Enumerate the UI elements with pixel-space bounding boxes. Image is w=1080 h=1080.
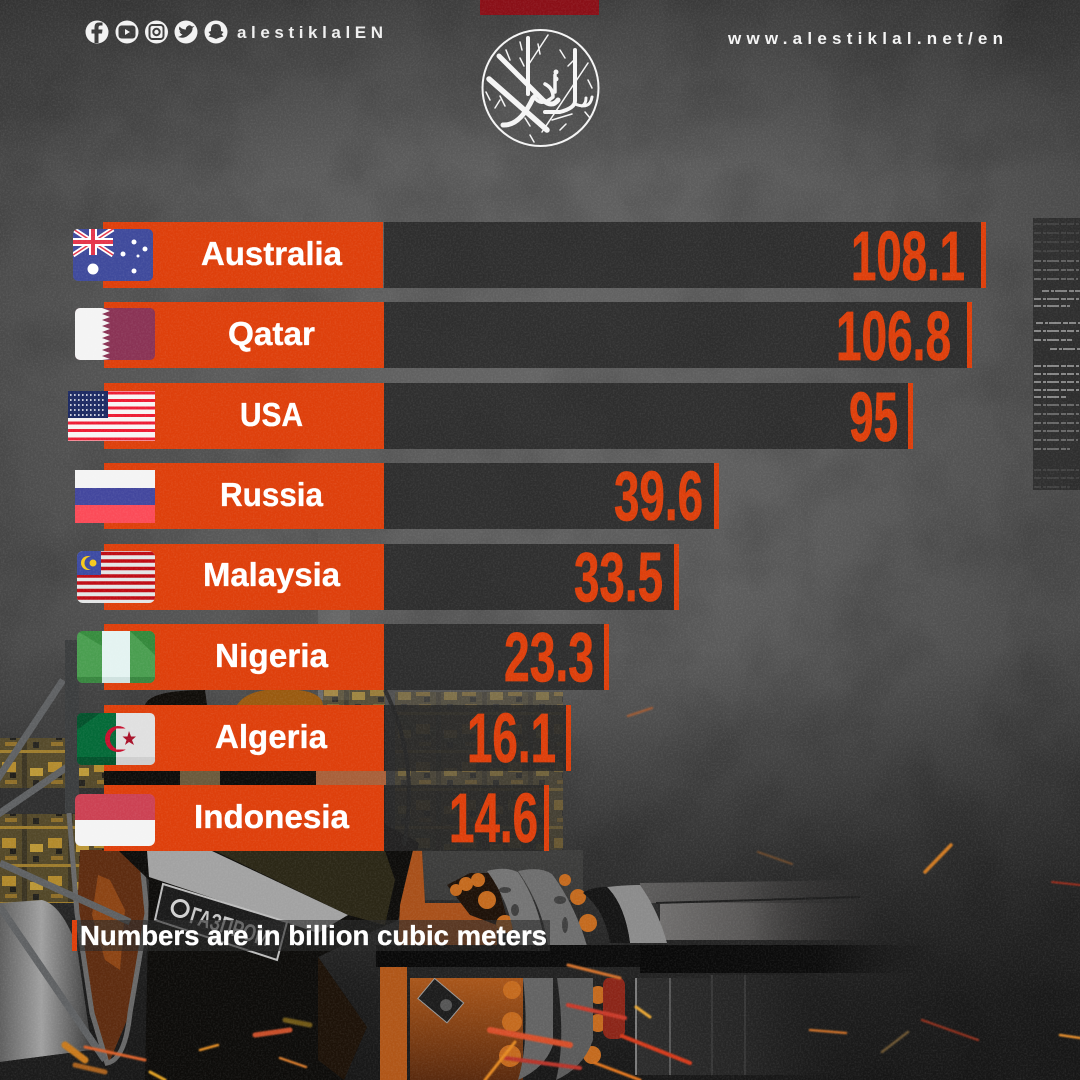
header: top red tab <box>480 0 599 15</box>
row: Australia <box>73 222 986 288</box>
row: Indonesia: 14.6 <box>449 779 538 857</box>
photo: orange valve and flange <box>380 850 625 1080</box>
photo: Gazprom badge <box>155 884 287 960</box>
row: Qatar: Qatar <box>228 315 315 352</box>
row: Algeria: 16.1 <box>467 699 556 777</box>
flag: Qatar <box>75 308 155 360</box>
icon: instagram <box>145 20 168 44</box>
photo: scaffold struts <box>0 640 409 1060</box>
newspaper text texture on right edge <box>1033 218 1080 490</box>
photo: worker in dark jacket <box>119 689 419 1080</box>
row: Australia: Australia <box>201 235 343 272</box>
logo: calligraphic roundel <box>482 30 598 146</box>
handle text: alestiklalEN <box>237 23 383 42</box>
header: social icons and handle <box>86 20 383 44</box>
flag: Indonesia <box>75 794 155 846</box>
row: Nigeria: Nigeria <box>215 637 329 674</box>
row: Indonesia <box>75 785 549 851</box>
row: USA: 95 <box>849 378 898 456</box>
row: Qatar <box>75 302 972 368</box>
photo: Gazprom badge: ГАЗПРОМ <box>187 902 273 952</box>
photo: steel beams <box>376 945 940 978</box>
row: Algeria: Algeria <box>215 718 328 755</box>
row: Indonesia: Indonesia <box>194 798 350 835</box>
row: Malaysia <box>77 544 679 610</box>
row: Nigeria: 23.3 <box>504 618 594 696</box>
row: Russia: 39.6 <box>614 457 703 535</box>
row: Russia <box>75 457 719 535</box>
icon: facebook <box>86 20 108 44</box>
unit note: Numbers are in billion cubic meters <box>80 920 547 951</box>
row: Australia: 108.1 <box>851 217 965 295</box>
row: Russia: Russia <box>220 476 324 513</box>
row: USA <box>68 378 913 456</box>
photo: grey flange discs <box>487 869 593 1080</box>
flag: Russia <box>75 470 155 523</box>
flag: USA <box>68 391 155 441</box>
flag: Nigeria <box>77 631 155 683</box>
row: Nigeria <box>77 624 609 690</box>
photo: right pipe fading out <box>583 880 880 1075</box>
photo: refinery background <box>0 530 583 903</box>
photo: left silver pipe <box>0 900 110 1080</box>
photo: valve label plate <box>418 978 464 1023</box>
chart: dark value bars <box>384 222 981 851</box>
row: Malaysia: 33.5 <box>574 538 663 616</box>
flag: Australia <box>73 229 153 281</box>
flag: Malaysia <box>77 551 155 603</box>
flag: Algeria <box>77 713 155 765</box>
photo: ring with orange flange <box>69 813 147 1065</box>
row: Algeria <box>77 705 571 771</box>
row: USA: USA <box>240 396 303 433</box>
icon: snapchat <box>204 20 228 44</box>
icon: youtube <box>116 20 138 44</box>
row: Malaysia: Malaysia <box>203 556 341 593</box>
header: website address: www.alestiklal.net/en <box>727 29 1003 48</box>
row: Qatar: 106.8 <box>836 297 951 375</box>
flying sparks <box>65 708 1080 1080</box>
icon: twitter <box>174 20 198 44</box>
